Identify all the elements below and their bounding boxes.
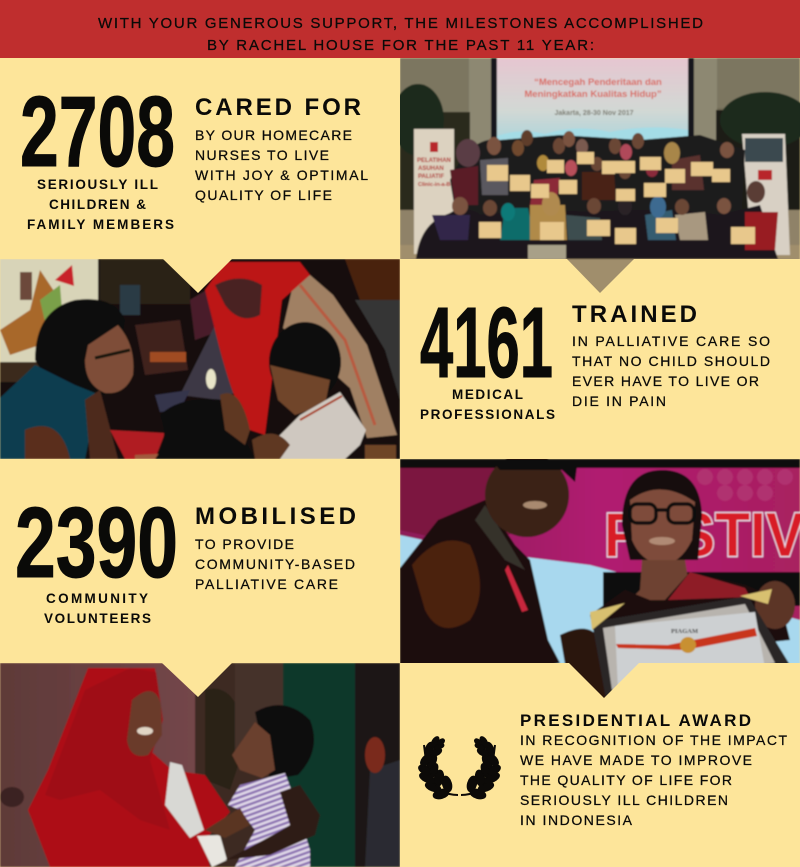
block: 2708 cared for (20, 76, 368, 232)
header banner: BY RACHEL HOUSE FOR THE PAST 11 YEAR: (207, 37, 594, 54)
header banner (0, 0, 800, 58)
stat: 2390: 2390 (15, 487, 178, 599)
stat caption: seriously ill children and family members: CHILDREN & (49, 197, 146, 212)
block: 4161 trained (420, 287, 770, 422)
seated row (416, 205, 778, 259)
screen text: “Mencegah Penderitaan dan (534, 77, 662, 88)
panel: mobilised background (0, 459, 400, 697)
panel: cared for background (0, 58, 399, 293)
panel: trained background (400, 259, 800, 459)
description: mobilised (195, 536, 355, 592)
description: presidential award: THE QUALITY OF LIFE FOR (520, 772, 732, 788)
certificates (479, 152, 755, 244)
header banner: WITH YOUR GENEROUS SUPPORT, THE MILESTONES ACCOMPLISHED (98, 15, 703, 32)
child (255, 705, 314, 780)
description: trained: THAT NO CHILD SHOULD (572, 353, 770, 369)
description: presidential award: IN RECOGNITION OF THE IMPACT (520, 732, 787, 748)
description: presidential award (520, 732, 787, 828)
description: presidential award: SERIOUSLY ILL CHILDREN (520, 792, 728, 808)
description: mobilised: COMMUNITY-BASED (195, 556, 355, 572)
stat caption: seriously ill children and family members (27, 177, 174, 232)
photo: award handover ceremony: PIAGAM (671, 628, 698, 635)
description: cared for: BY OUR HOMECARE (195, 127, 352, 143)
stat: 2708: 2708 (20, 76, 175, 188)
woman left (35, 299, 125, 400)
photo: training group with certificates: ASUHAN (418, 166, 444, 172)
woman right (283, 275, 397, 438)
photo: training group with certificates: PELATIHAN (417, 158, 451, 164)
dark legs (155, 399, 255, 459)
banner left (414, 129, 454, 254)
photo: training group with certificates: Clinic-in-a-Box (418, 182, 458, 188)
icon: laurel wreath (417, 735, 502, 800)
description: trained: EVER HAVE TO LIVE OR (572, 373, 759, 389)
heading: presidential award: PRESIDENTIAL AWARD (520, 711, 751, 730)
photo: training group with certificates: Jakarta, 28-30 Nov 2017 (554, 110, 634, 117)
description: cared for: WITH JOY & OPTIMAL (195, 167, 368, 183)
man in batik (400, 500, 560, 663)
description: trained (572, 333, 770, 409)
background right (345, 259, 400, 300)
photo: training group with certificates (392, 58, 800, 300)
fan (181, 327, 234, 401)
child (268, 321, 342, 391)
description: trained: DIE IN PAIN (572, 393, 666, 409)
panel: award background (400, 663, 800, 867)
description: cared for (195, 127, 368, 203)
description: trained: IN PALLIATIVE CARE SO (572, 333, 770, 349)
stat caption: community volunteers: VOLUNTEERS (44, 611, 151, 626)
photo: award handover ceremony (400, 453, 800, 699)
hand and notch shadow (560, 629, 606, 699)
photo: homecare nurse with child (0, 259, 400, 459)
description: mobilised: PALLIATIVE CARE (195, 576, 338, 592)
description: presidential award: IN INDONESIA (520, 812, 633, 828)
stat caption: medical professionals: PROFESSIONALS (420, 407, 555, 422)
certificate frame (592, 596, 790, 699)
standing and kneeling people (449, 134, 746, 216)
description: cared for: QUALITY OF LIFE (195, 187, 332, 203)
stat: 4161: 4161 (420, 287, 553, 399)
woman (28, 668, 230, 867)
stat caption: seriously ill children and family members: FAMILY MEMBERS (27, 217, 174, 232)
photo: volunteer with child (0, 663, 400, 867)
banner right (742, 134, 790, 255)
stat caption: medical professionals: MEDICAL (452, 387, 523, 402)
heading: cared for: CARED FOR (195, 94, 361, 121)
heading: trained: TRAINED (572, 301, 697, 328)
photo: training group with certificates: Meningkatkan Kualitas Hidup” (524, 89, 662, 100)
description: mobilised: TO PROVIDE (195, 536, 294, 552)
stat caption: medical professionals (420, 387, 555, 422)
red cushion (110, 430, 165, 459)
description: cared for: NURSES TO LIVE (195, 147, 329, 163)
photo: training group with certificates: PALIATIF (418, 174, 444, 180)
description: presidential award: WE HAVE MADE TO IMPROVE (520, 752, 752, 768)
heading: mobilised: MOBILISED (195, 503, 356, 530)
block: presidential award (417, 711, 787, 828)
stat caption: seriously ill children and family members: SERIOUSLY ILL (37, 177, 158, 192)
woman (622, 470, 702, 560)
stat caption: community volunteers: COMMUNITY (46, 591, 148, 606)
block: 2390 mobilised (15, 487, 356, 626)
stat caption: community volunteers (44, 591, 151, 626)
